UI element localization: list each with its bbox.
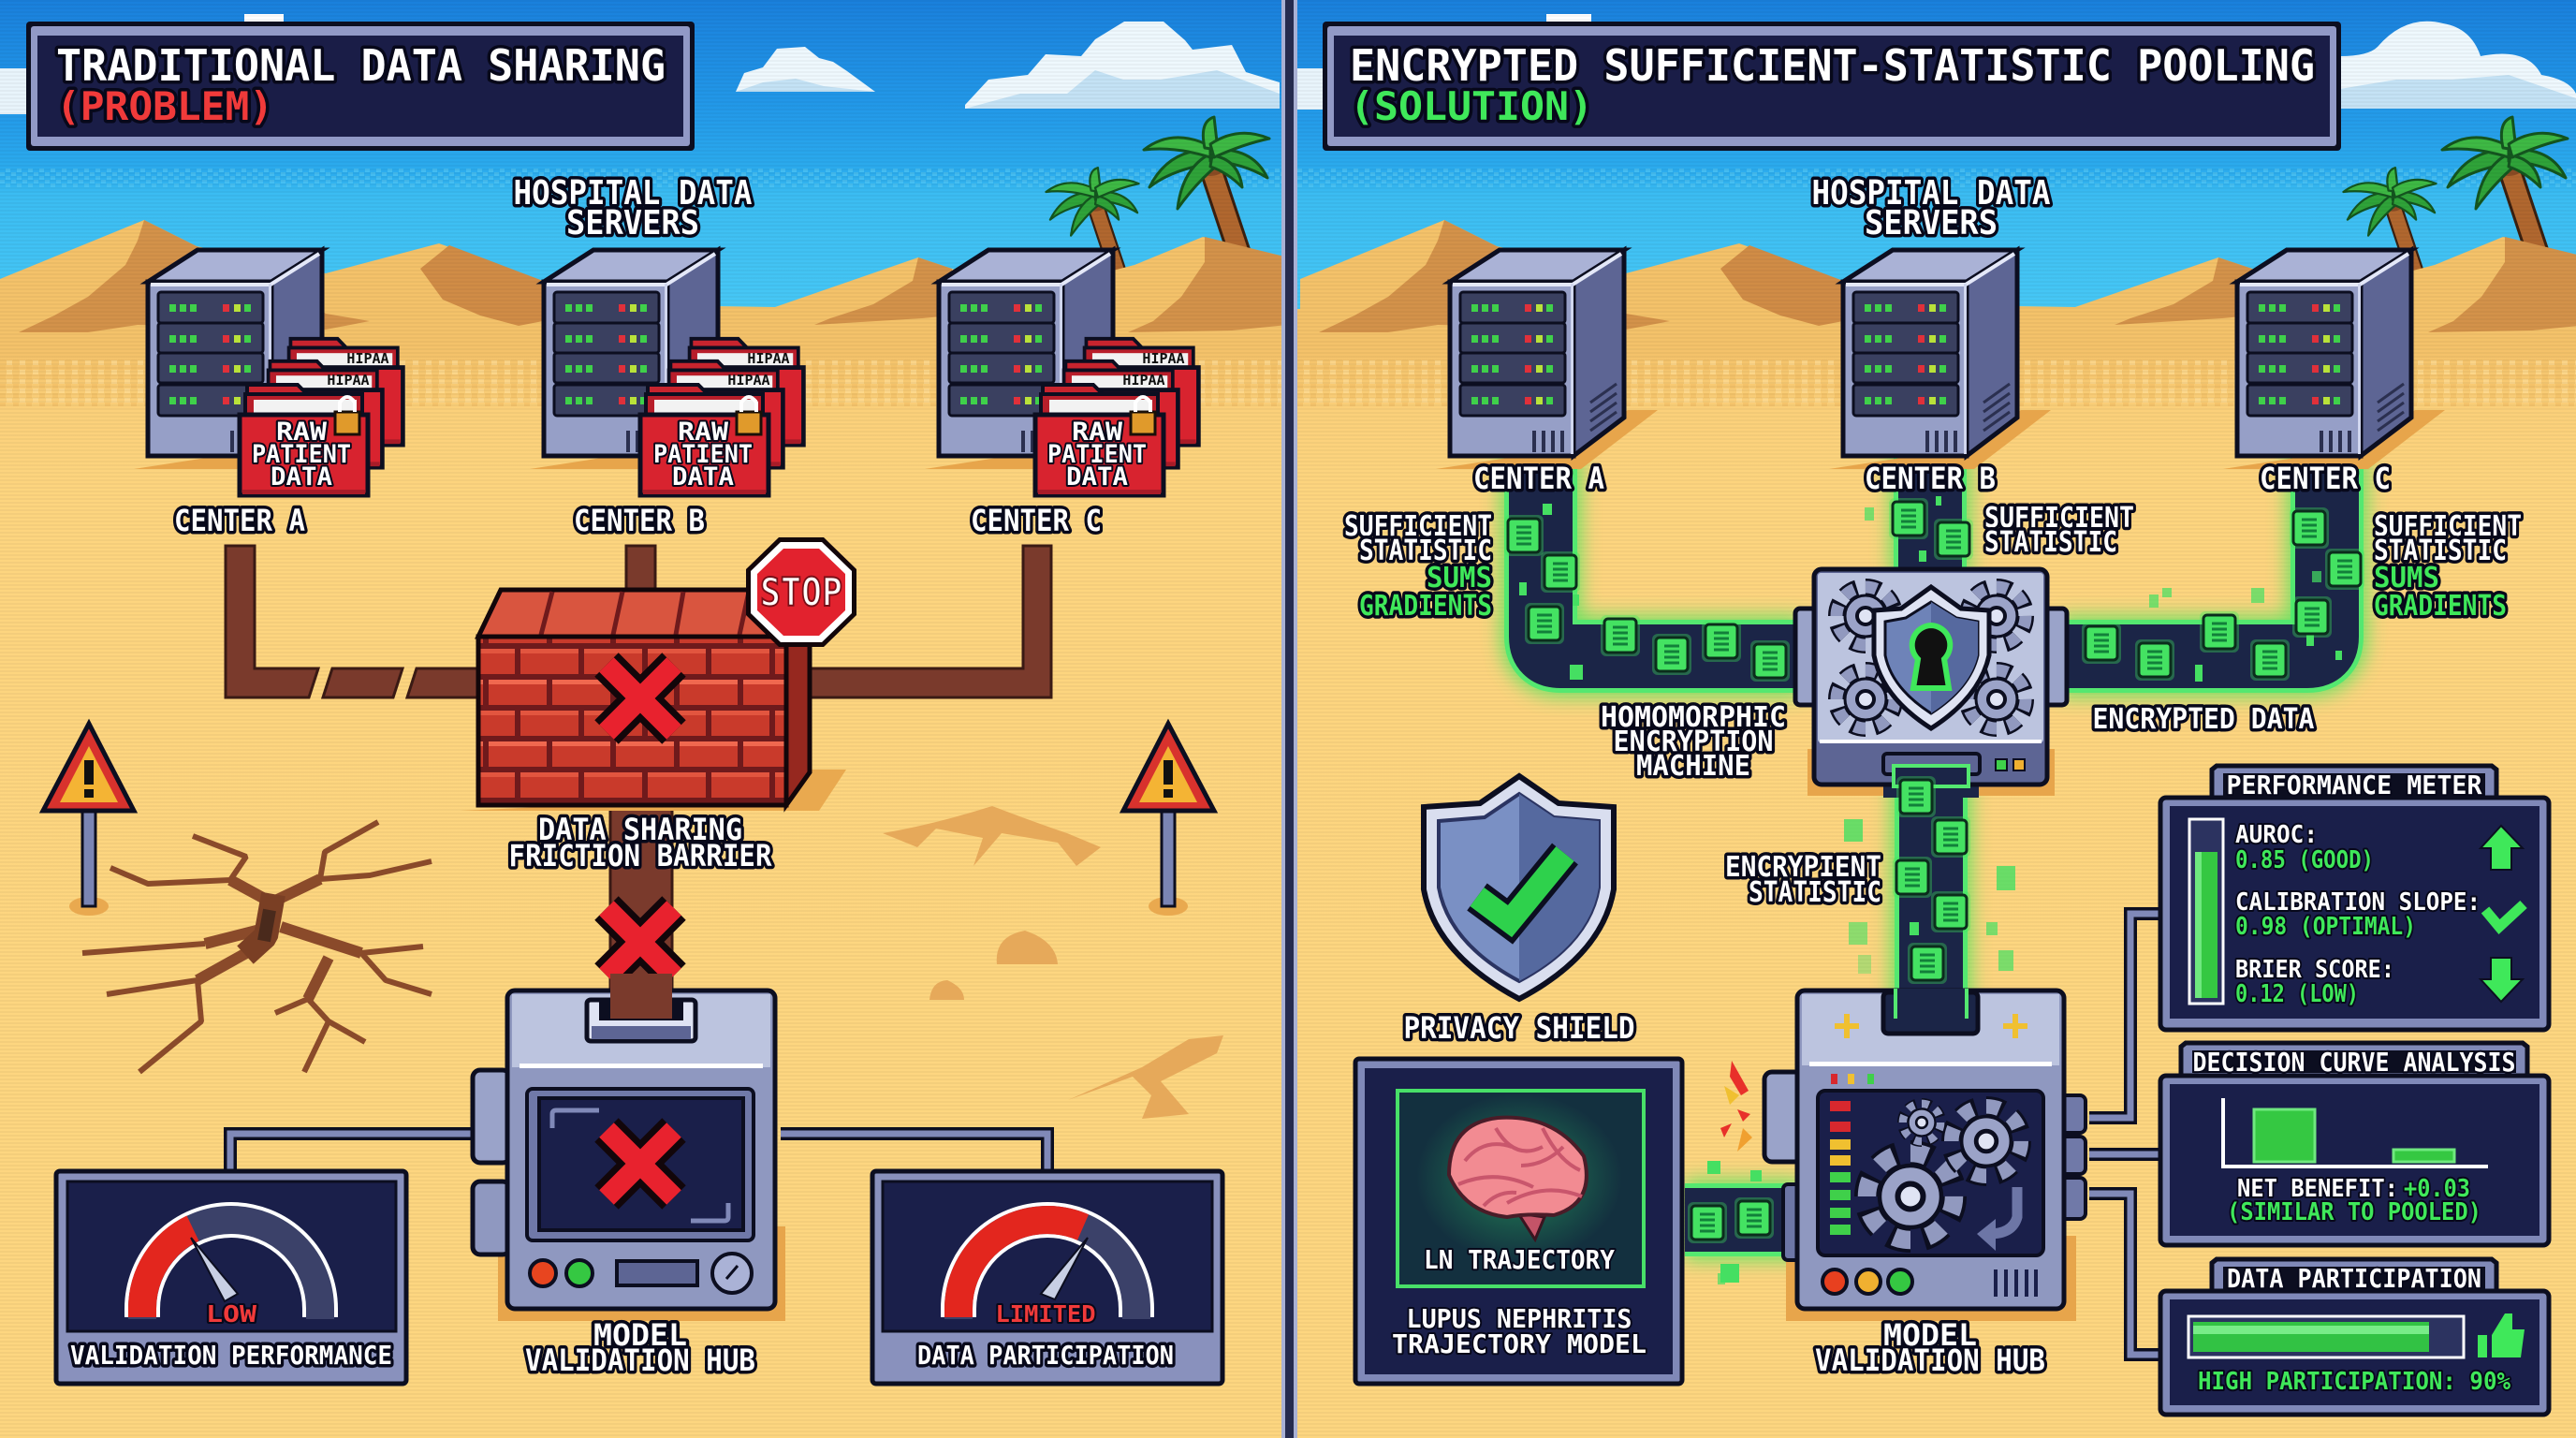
label: right sufficient statistic: STATISTIC <box>2374 535 2507 567</box>
panel: decision curve analysis: (SIMILAR TO POOLED) <box>2227 1198 2481 1226</box>
clouds: right panel <box>1297 14 2576 110</box>
encrypted packets <box>1504 498 2364 1243</box>
warning sign: right <box>1123 724 1214 916</box>
folder stack: center B raw patient data: HIPAA <box>747 350 790 367</box>
panel: lupus nephritis trajectory model: LUPUS NEPHRITIS <box>1406 1303 1632 1334</box>
panel: performance meter: 0.98 (OPTIMAL) <box>2235 913 2416 941</box>
panel: data participation gauge: DATA PARTICIPATION <box>917 1340 1174 1371</box>
scene background: sky <box>0 0 2576 323</box>
panel: decision curve analysis: +0.03 <box>2404 1175 2470 1203</box>
stop sign: STOP <box>760 569 842 615</box>
panel: validation performance gauge: LOW <box>206 1300 257 1328</box>
label: center A: CENTER A <box>174 503 305 538</box>
panel: performance meter: PERFORMANCE METER <box>2226 770 2482 800</box>
center divider <box>1281 0 1297 1438</box>
folder stack: center C raw patient data: HIPAA <box>1142 350 1185 367</box>
label: right sufficient statistic: SUMS <box>2374 562 2439 594</box>
icon: down arrow <box>2481 958 2523 1002</box>
sparks <box>1720 1061 1752 1152</box>
clouds: left panel <box>0 14 1280 114</box>
server: center C <box>2223 250 2445 469</box>
label: hospital data servers <box>513 174 753 242</box>
folder stack: center C raw patient data: DATA <box>1066 462 1128 492</box>
scene background: sand <box>0 309 2576 1438</box>
warning sign: left <box>43 724 134 916</box>
folder stack: center B raw patient data: HIPAA <box>727 372 770 389</box>
dunes: left panel <box>0 220 1288 352</box>
label: privacy shield: PRIVACY SHIELD <box>1404 1010 1634 1046</box>
panel: decision curve analysis: DECISION CURVE ANALYSIS <box>2192 1047 2516 1078</box>
label: hospital data servers: SERVERS <box>1865 204 1998 242</box>
panel: decision curve analysis <box>2160 1043 2549 1245</box>
panel: performance meter: AUROC: <box>2235 821 2318 849</box>
stop sign <box>746 537 856 647</box>
homomorphic encryption machine <box>1795 569 2067 798</box>
label: homomorphic encryption machine: ENCRYPTION <box>1614 726 1773 758</box>
sand dither band <box>0 360 2576 406</box>
folder stack: center B raw patient data: PATIENT <box>653 440 753 469</box>
panel: data participation: DATA PARTICIPATION <box>2227 1263 2481 1294</box>
label: center C: CENTER C <box>2260 461 2391 496</box>
title panel: traditional data sharing: (PROBLEM) <box>56 83 273 129</box>
X mark on blocked pipe <box>607 908 674 976</box>
panel: lupus nephritis trajectory model <box>1355 1059 1682 1384</box>
title panel: encrypted sufficient-statistic pooling: (SOLUTION) <box>1350 83 1593 129</box>
label: model validation hub <box>1815 1317 2045 1378</box>
panel: performance meter <box>2160 766 2549 1030</box>
folder stack: center A raw patient data: HIPAA <box>346 350 389 367</box>
panel: decision curve analysis: NET BENEFIT: <box>2237 1175 2398 1203</box>
label: encrypted data: ENCRYPTED DATA <box>2093 703 2314 736</box>
palm trees: left panel <box>1046 117 1269 279</box>
server: center B <box>1829 250 2051 469</box>
folder stack: center A raw patient data <box>240 339 402 495</box>
folder stack: center A raw patient data: HIPAA <box>327 372 370 389</box>
bar chart <box>2223 1098 2488 1167</box>
label: center sufficient statistic: STATISTIC <box>1984 526 2117 559</box>
panel: validation performance gauge <box>56 1171 406 1384</box>
icon: brain <box>1449 1118 1587 1240</box>
label: right sufficient statistic <box>2374 510 2522 623</box>
panel: data participation: HIGH PARTICIPATION: 90% <box>2198 1368 2510 1396</box>
label: data sharing friction barrier: FRICTION BARRIER <box>509 838 772 873</box>
label: data sharing friction barrier: DATA SHARING <box>538 812 742 847</box>
folder stack: center A raw patient data: PATIENT <box>252 440 351 469</box>
LEFT PANEL <box>26 22 1223 1384</box>
folder stack: center A raw patient data: RAW <box>276 418 328 447</box>
label: encrypient statistic <box>1725 851 1881 909</box>
icon: thumbs up <box>2478 1313 2525 1357</box>
label: model validation hub: VALIDATION HUB <box>525 1343 755 1378</box>
server: center A <box>1436 250 1658 469</box>
label: hospital data servers: HOSPITAL DATA <box>1812 174 2051 213</box>
panel: validation performance gauge: VALIDATION PERFORMANCE <box>70 1340 392 1371</box>
icon: check <box>2485 904 2524 927</box>
label: hospital data servers: HOSPITAL DATA <box>513 174 753 213</box>
panel: performance meter: CALIBRATION SLOPE: <box>2235 888 2481 917</box>
wires to result panels <box>2089 914 2164 1355</box>
label: model validation hub <box>525 1317 755 1378</box>
label: model validation hub: VALIDATION HUB <box>1815 1343 2045 1378</box>
label: left sufficient statistic: GRADIENTS <box>1359 590 1492 623</box>
label: right sufficient statistic: SUFFICIENT <box>2374 510 2522 543</box>
folder stack: center C raw patient data: RAW <box>1072 418 1123 447</box>
floating data particles <box>1519 496 2342 1284</box>
folder stack: center C raw patient data: HIPAA <box>1122 372 1165 389</box>
label: model validation hub: MODEL <box>1883 1317 1977 1353</box>
label: left sufficient statistic: STATISTIC <box>1359 535 1492 567</box>
label: homomorphic encryption machine: MACHINE <box>1636 750 1750 783</box>
label: center A: CENTER A <box>1473 461 1604 496</box>
panel: data participation gauge <box>872 1171 1222 1384</box>
label: center sufficient statistic: SUFFICIENT <box>1984 502 2134 535</box>
server: center B <box>530 250 752 469</box>
panel: data participation gauge: LIMITED <box>996 1300 1095 1328</box>
label: homomorphic encryption machine <box>1601 701 1786 783</box>
folder stack: center C raw patient data <box>1035 339 1198 495</box>
label: center B: CENTER B <box>574 503 705 538</box>
panel: lupus nephritis trajectory model: TRAJECTORY MODEL <box>1392 1328 1647 1359</box>
server: center A <box>134 250 356 469</box>
encrypted data channels with glow <box>1541 454 2327 1220</box>
wires to gauges <box>230 1134 1047 1172</box>
title panel: encrypted sufficient-statistic pooling <box>1323 22 2341 151</box>
panel: performance meter: 0.85 (GOOD) <box>2235 846 2374 874</box>
label: center sufficient statistic <box>1984 502 2134 559</box>
label: homomorphic encryption machine: HOMOMORPHIC <box>1601 701 1786 734</box>
broken pipes into barrier <box>226 546 1051 1020</box>
panel: data participation <box>2160 1259 2549 1415</box>
label: encrypient statistic: ENCRYPIENT <box>1725 851 1881 884</box>
server: center C <box>925 250 1147 469</box>
label: data sharing friction barrier <box>509 812 772 873</box>
dunes: right panel <box>1300 220 2576 352</box>
RIGHT PANEL <box>1323 22 2549 1415</box>
label: encrypient statistic: STATISTIC <box>1749 876 1881 909</box>
label: hospital data servers: SERVERS <box>566 204 699 242</box>
folder stack: center C raw patient data: PATIENT <box>1047 440 1147 469</box>
title panel: traditional data sharing <box>26 22 695 151</box>
folder stack: center B raw patient data: DATA <box>672 462 734 492</box>
model validation hub: blocked <box>473 974 785 1321</box>
label: left sufficient statistic: SUFFICIENT <box>1344 510 1492 543</box>
title panel: encrypted sufficient-statistic pooling: ENCRYPTED SUFFICIENT-STATISTIC POOLING <box>1350 40 2315 91</box>
folder stack: center B raw patient data: RAW <box>678 418 729 447</box>
vertical meter bar <box>2189 819 2223 1004</box>
model validation hub: operational <box>1764 989 2086 1321</box>
panel: lupus nephritis trajectory model: LN TRAJECTORY <box>1424 1244 1615 1275</box>
label: left sufficient statistic: SUMS <box>1427 562 1492 594</box>
panel: performance meter: BRIER SCORE: <box>2235 956 2394 984</box>
icon: up arrow <box>2481 826 2523 870</box>
label: center B: CENTER B <box>1865 461 1996 496</box>
label: center C: CENTER C <box>971 503 1102 538</box>
palm trees: right panel <box>2343 117 2568 279</box>
title panel: traditional data sharing: TRADITIONAL DATA SHARING <box>56 40 666 91</box>
label: left sufficient statistic <box>1344 510 1492 623</box>
sky dither band <box>0 169 2576 187</box>
label: hospital data servers <box>1812 174 2051 242</box>
folder stack: center B raw patient data <box>640 339 803 495</box>
X mark on wall <box>607 665 674 732</box>
folder stack: center A raw patient data: DATA <box>271 462 332 492</box>
friction barrier: brick wall <box>460 590 846 811</box>
label: right sufficient statistic: GRADIENTS <box>2374 590 2507 623</box>
cracked ground <box>82 822 432 1072</box>
sand patches and rocks <box>883 806 1223 1119</box>
icon: privacy shield <box>1424 776 1614 999</box>
progress bar: 90% <box>2188 1316 2464 1357</box>
label: model validation hub: MODEL <box>593 1317 687 1353</box>
panel: performance meter: 0.12 (LOW) <box>2235 980 2359 1008</box>
